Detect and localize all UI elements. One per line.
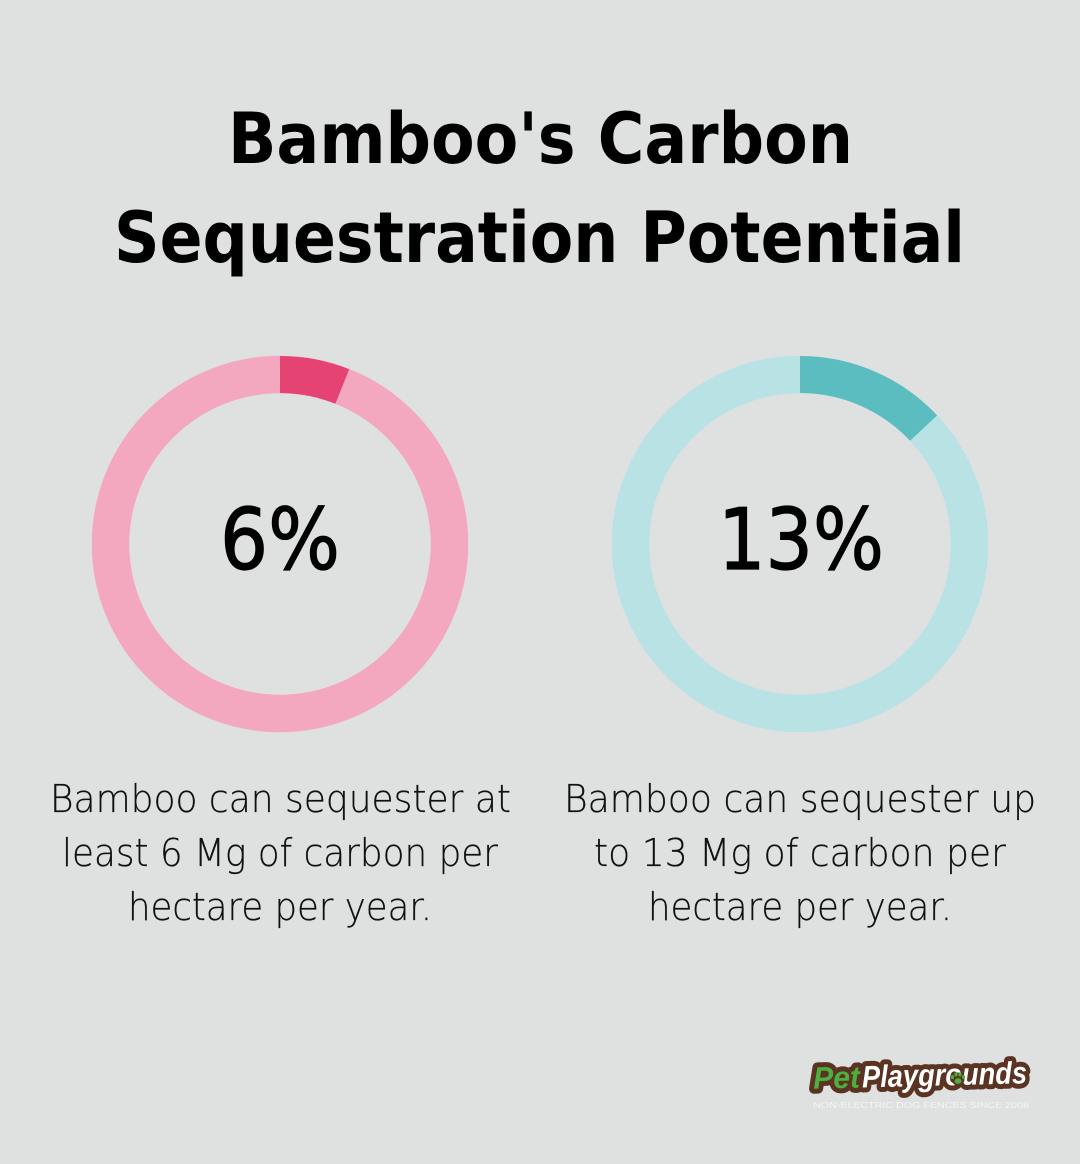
panel: 6% stat xyxy=(50,356,511,930)
donut chart: 6% xyxy=(110,356,450,714)
logo: Pet Playgrounds xyxy=(813,1055,1029,1110)
description: 13 Mg: Bamboo can sequester up xyxy=(564,777,1036,822)
description: 6 Mg xyxy=(50,777,511,930)
description: 6 Mg: hectare per year. xyxy=(128,885,432,930)
description: 13 Mg: to 13 Mg of carbon per xyxy=(594,831,1006,876)
value: 13%: 13% xyxy=(718,491,884,590)
logo wordmark: Pet xyxy=(813,1060,862,1096)
title: Sequestration Potential xyxy=(114,197,965,279)
logo wordmark xyxy=(813,1055,1027,1096)
title: Bamboo's Carbon xyxy=(228,98,853,180)
donut chart: 13% xyxy=(630,356,970,714)
logo tagline: NON-ELECTRIC DOG FENCES SINCE 2008 xyxy=(813,1100,1029,1110)
logo wordmark: Playgrounds xyxy=(862,1055,1027,1095)
description: 13 Mg: hectare per year. xyxy=(648,885,952,930)
description: 6 Mg: least 6 Mg of carbon per xyxy=(62,831,498,876)
icon: paw xyxy=(951,1072,965,1086)
panel: 13% stat xyxy=(564,356,1036,930)
value: 6%: 6% xyxy=(220,491,340,590)
title xyxy=(114,98,965,279)
description: 13 Mg xyxy=(564,777,1036,930)
description: 6 Mg: Bamboo can sequester at xyxy=(50,777,511,822)
